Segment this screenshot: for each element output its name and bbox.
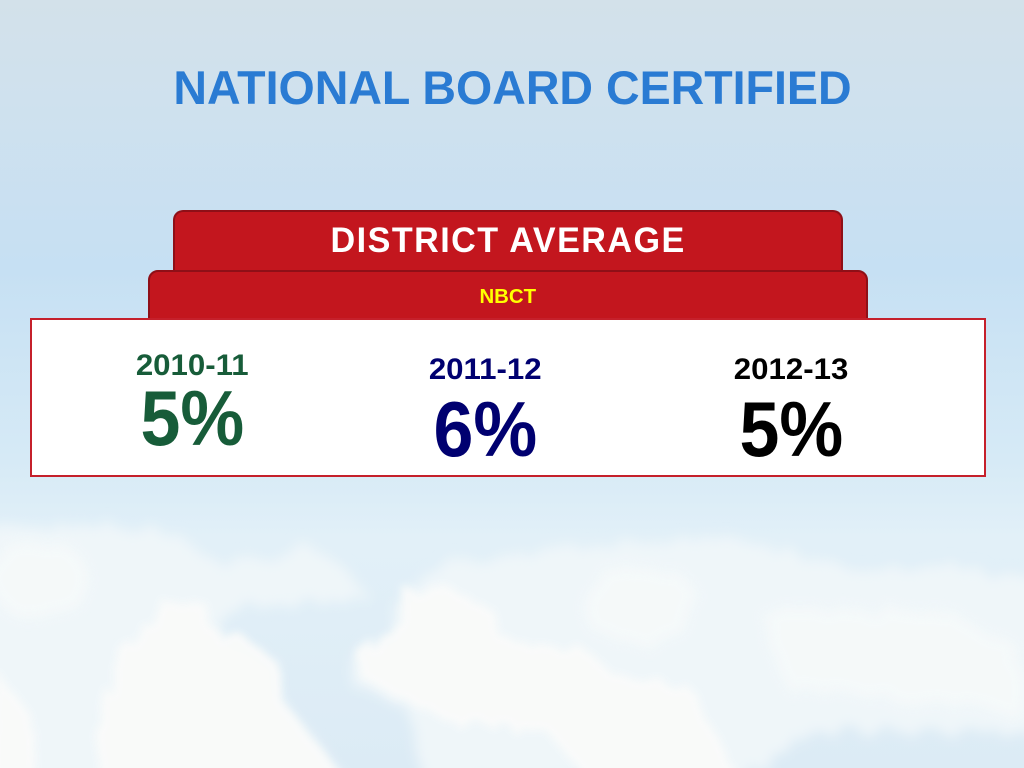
panel: yearly percentages: [30, 318, 986, 477]
panel: district average tab: [173, 210, 843, 274]
value 5%: 5%: [140, 374, 244, 462]
year label 2012-13: 2012-13: [734, 353, 848, 386]
stat: 2012-13: [734, 353, 848, 473]
stat: 2011-12: [429, 353, 541, 473]
value 6%: 6%: [433, 385, 537, 473]
panel: district average tab: DISTRICT AVERAGE: [330, 221, 686, 260]
panel: NBCT tab: NBCT: [480, 286, 536, 308]
title: NATIONAL BOARD CERTIFIED: [173, 61, 851, 114]
stat: 2010-11: [136, 349, 248, 462]
year label 2010-11: 2010-11: [136, 349, 248, 382]
year label 2011-12: 2011-12: [429, 353, 541, 386]
value 5%: 5%: [739, 385, 843, 473]
panel: NBCT tab: [148, 270, 868, 322]
